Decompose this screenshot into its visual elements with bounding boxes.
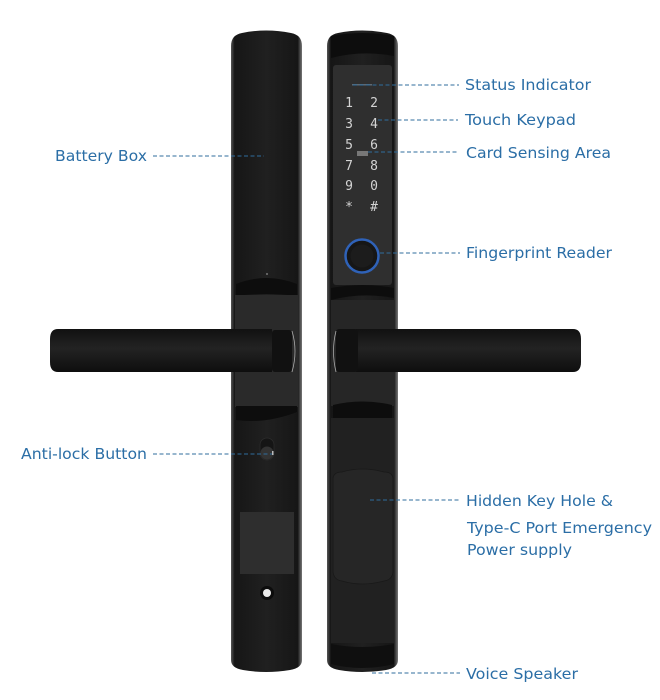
callout: fingerprint reader: Fingerprint Reader [466, 244, 613, 262]
hidden key hole cover [333, 469, 393, 584]
keypad digits: 3 [345, 117, 353, 132]
keypad digits: 2 [370, 96, 378, 111]
keypad digits: 7 [345, 159, 353, 174]
callout: hidden key hole: Power supply [467, 541, 572, 559]
keypad digits: * [345, 200, 353, 215]
anti-lock button [260, 438, 274, 460]
keypad panel [333, 65, 392, 285]
battery compartment plate [240, 512, 294, 574]
screw hole [260, 586, 274, 600]
callout: hidden key hole: Hidden Key Hole & [466, 492, 613, 510]
callout: hidden key hole: Type-C Port Emergency [466, 519, 652, 537]
callout: battery box: Battery Box [55, 147, 147, 165]
keypad digits: 6 [370, 138, 378, 153]
fingerprint reader [346, 240, 378, 272]
keypad digits: 0 [370, 179, 378, 194]
keypad digits: 8 [370, 159, 378, 174]
left handle [50, 329, 295, 372]
callout: touch keypad: Touch Keypad [464, 111, 576, 129]
keypad digits: 9 [345, 179, 353, 194]
keypad digits: 5 [345, 138, 353, 153]
status indicator [352, 84, 372, 86]
right lock panel (keypad side) [327, 30, 398, 672]
keypad digits [345, 96, 378, 215]
callout: card sensing area: Card Sensing Area [466, 144, 611, 162]
callout: voice speaker: Voice Speaker [466, 665, 579, 683]
keypad digits: 4 [370, 117, 378, 132]
battery box status dot [266, 273, 268, 275]
callout: hidden key hole [370, 492, 652, 559]
card sensing icon [357, 151, 368, 156]
top scoop [331, 33, 394, 58]
callout: anti-lock button: Anti-lock Button [21, 445, 147, 463]
callout: status indicator: Status Indicator [465, 76, 592, 94]
right handle [334, 329, 581, 372]
voice speaker scoop [331, 644, 394, 668]
keypad digits: # [370, 200, 378, 215]
left lock panel (battery side) [231, 30, 302, 672]
keypad digits: 1 [345, 96, 353, 111]
